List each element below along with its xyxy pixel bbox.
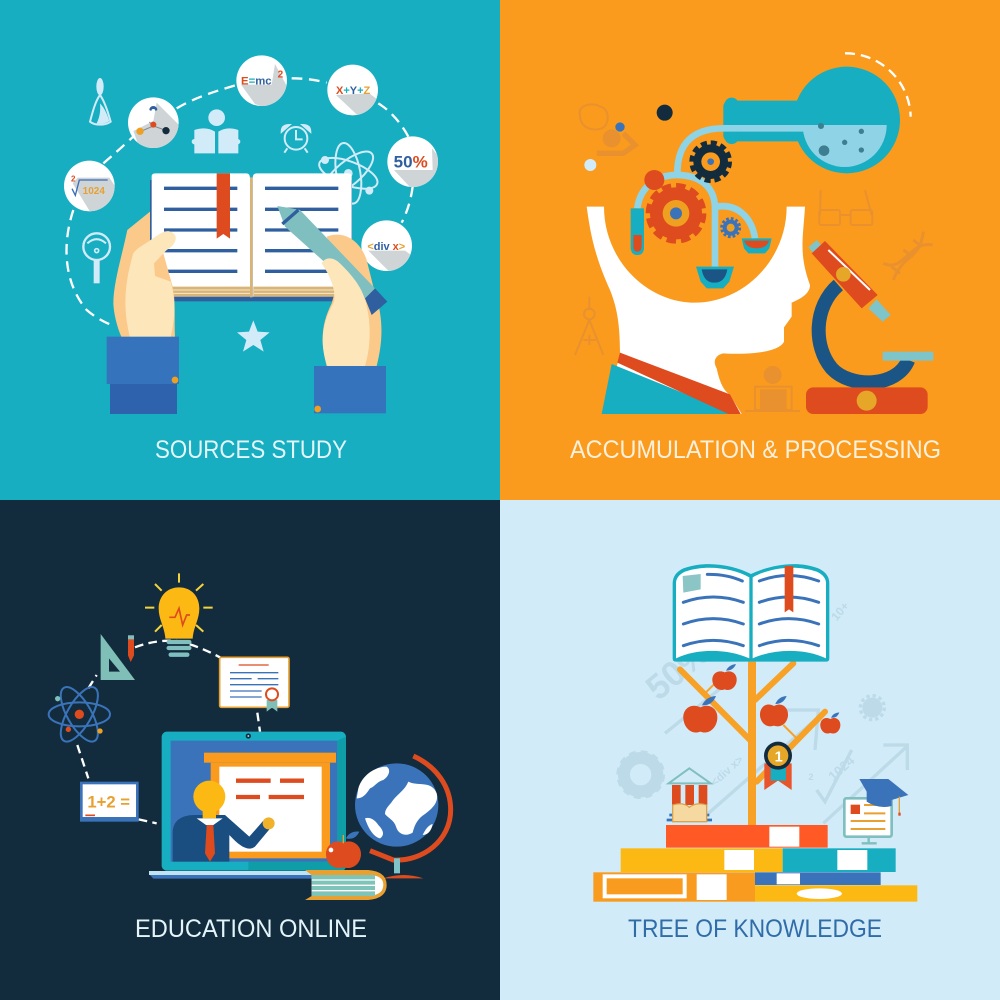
flask [723,67,900,173]
medal [764,742,792,790]
globe [355,756,451,878]
title: tree of knowledge: TREE OF KNOWLEDGE [628,915,882,943]
open book [150,173,352,301]
teacher [173,781,275,862]
apple [326,832,361,868]
faint background icons: 10+ [828,599,852,624]
icon: set square and pencil [101,634,135,680]
projection screen [204,753,336,858]
icon: alarm clock [282,125,310,153]
math board: 1+2 = [87,792,130,811]
microscope [806,240,933,414]
gear: small blue [722,219,740,237]
dots [584,105,673,171]
icon: star [237,320,270,352]
faint background icons [619,599,907,823]
right hand and pen [277,206,387,366]
icon: light bulb [145,573,213,655]
faint background icons: <div x> [709,754,746,789]
icon: reader [192,109,240,153]
circle: E=mc2: 2 [278,69,284,80]
collar [602,353,741,414]
apples [683,664,840,734]
faint background icons: 2 [808,772,814,782]
circle: 50%: 50% [394,153,428,172]
panel: sources study [0,0,500,500]
title: accumulation and processing: ACCUMULATION & PROCESSING [570,436,941,464]
bowls [696,238,772,288]
left hand [113,212,176,337]
panel: education online [0,500,500,1000]
gear: orange [644,170,703,241]
medal: 1 [775,749,783,765]
math board [80,782,139,822]
tubes [637,128,803,267]
faint icons [575,104,933,411]
head silhouette [587,207,810,414]
circle: E=mc2: E=mc [241,76,272,88]
gear: dark [692,143,729,180]
book stack [593,825,917,902]
circle: div x [361,220,412,271]
icon: atom [49,682,110,747]
dashed arc [845,53,911,117]
title: education online: EDUCATION ONLINE [135,915,367,943]
test tube [631,208,644,255]
faint background icons: 1024 [825,753,858,784]
tree [680,662,825,825]
icon: bell [90,78,111,125]
icon: monitor and cap [844,779,908,843]
icon: institution [667,768,712,822]
dashed orbit [77,641,260,823]
circle: sqrt 1024: 1024 [83,186,105,197]
circle: molecule [128,97,179,148]
circle: div x: <div x> [367,241,405,253]
circle: sqrt 1024: 2 [71,174,76,183]
dashed orbit [66,78,413,325]
panel: tree of knowledge [500,500,1000,1000]
circle: X+Y+Z [327,64,378,116]
cuffs [107,337,386,414]
faint background icons: 50% [638,633,717,708]
circle: X+Y+Z: X+Y+Z [336,85,370,97]
stacked book [305,870,387,900]
panel: accumulation and processing [500,0,1000,500]
laptop [149,732,346,879]
icon: magnifier [83,233,110,283]
icon: atom [315,141,381,206]
certificate [220,657,289,712]
title: sources study: SOURCES STUDY [155,436,347,464]
open book [673,564,829,662]
circle: 50% [387,136,438,187]
circle: sqrt 1024 [64,160,115,212]
circle: E=mc2 [236,55,288,111]
